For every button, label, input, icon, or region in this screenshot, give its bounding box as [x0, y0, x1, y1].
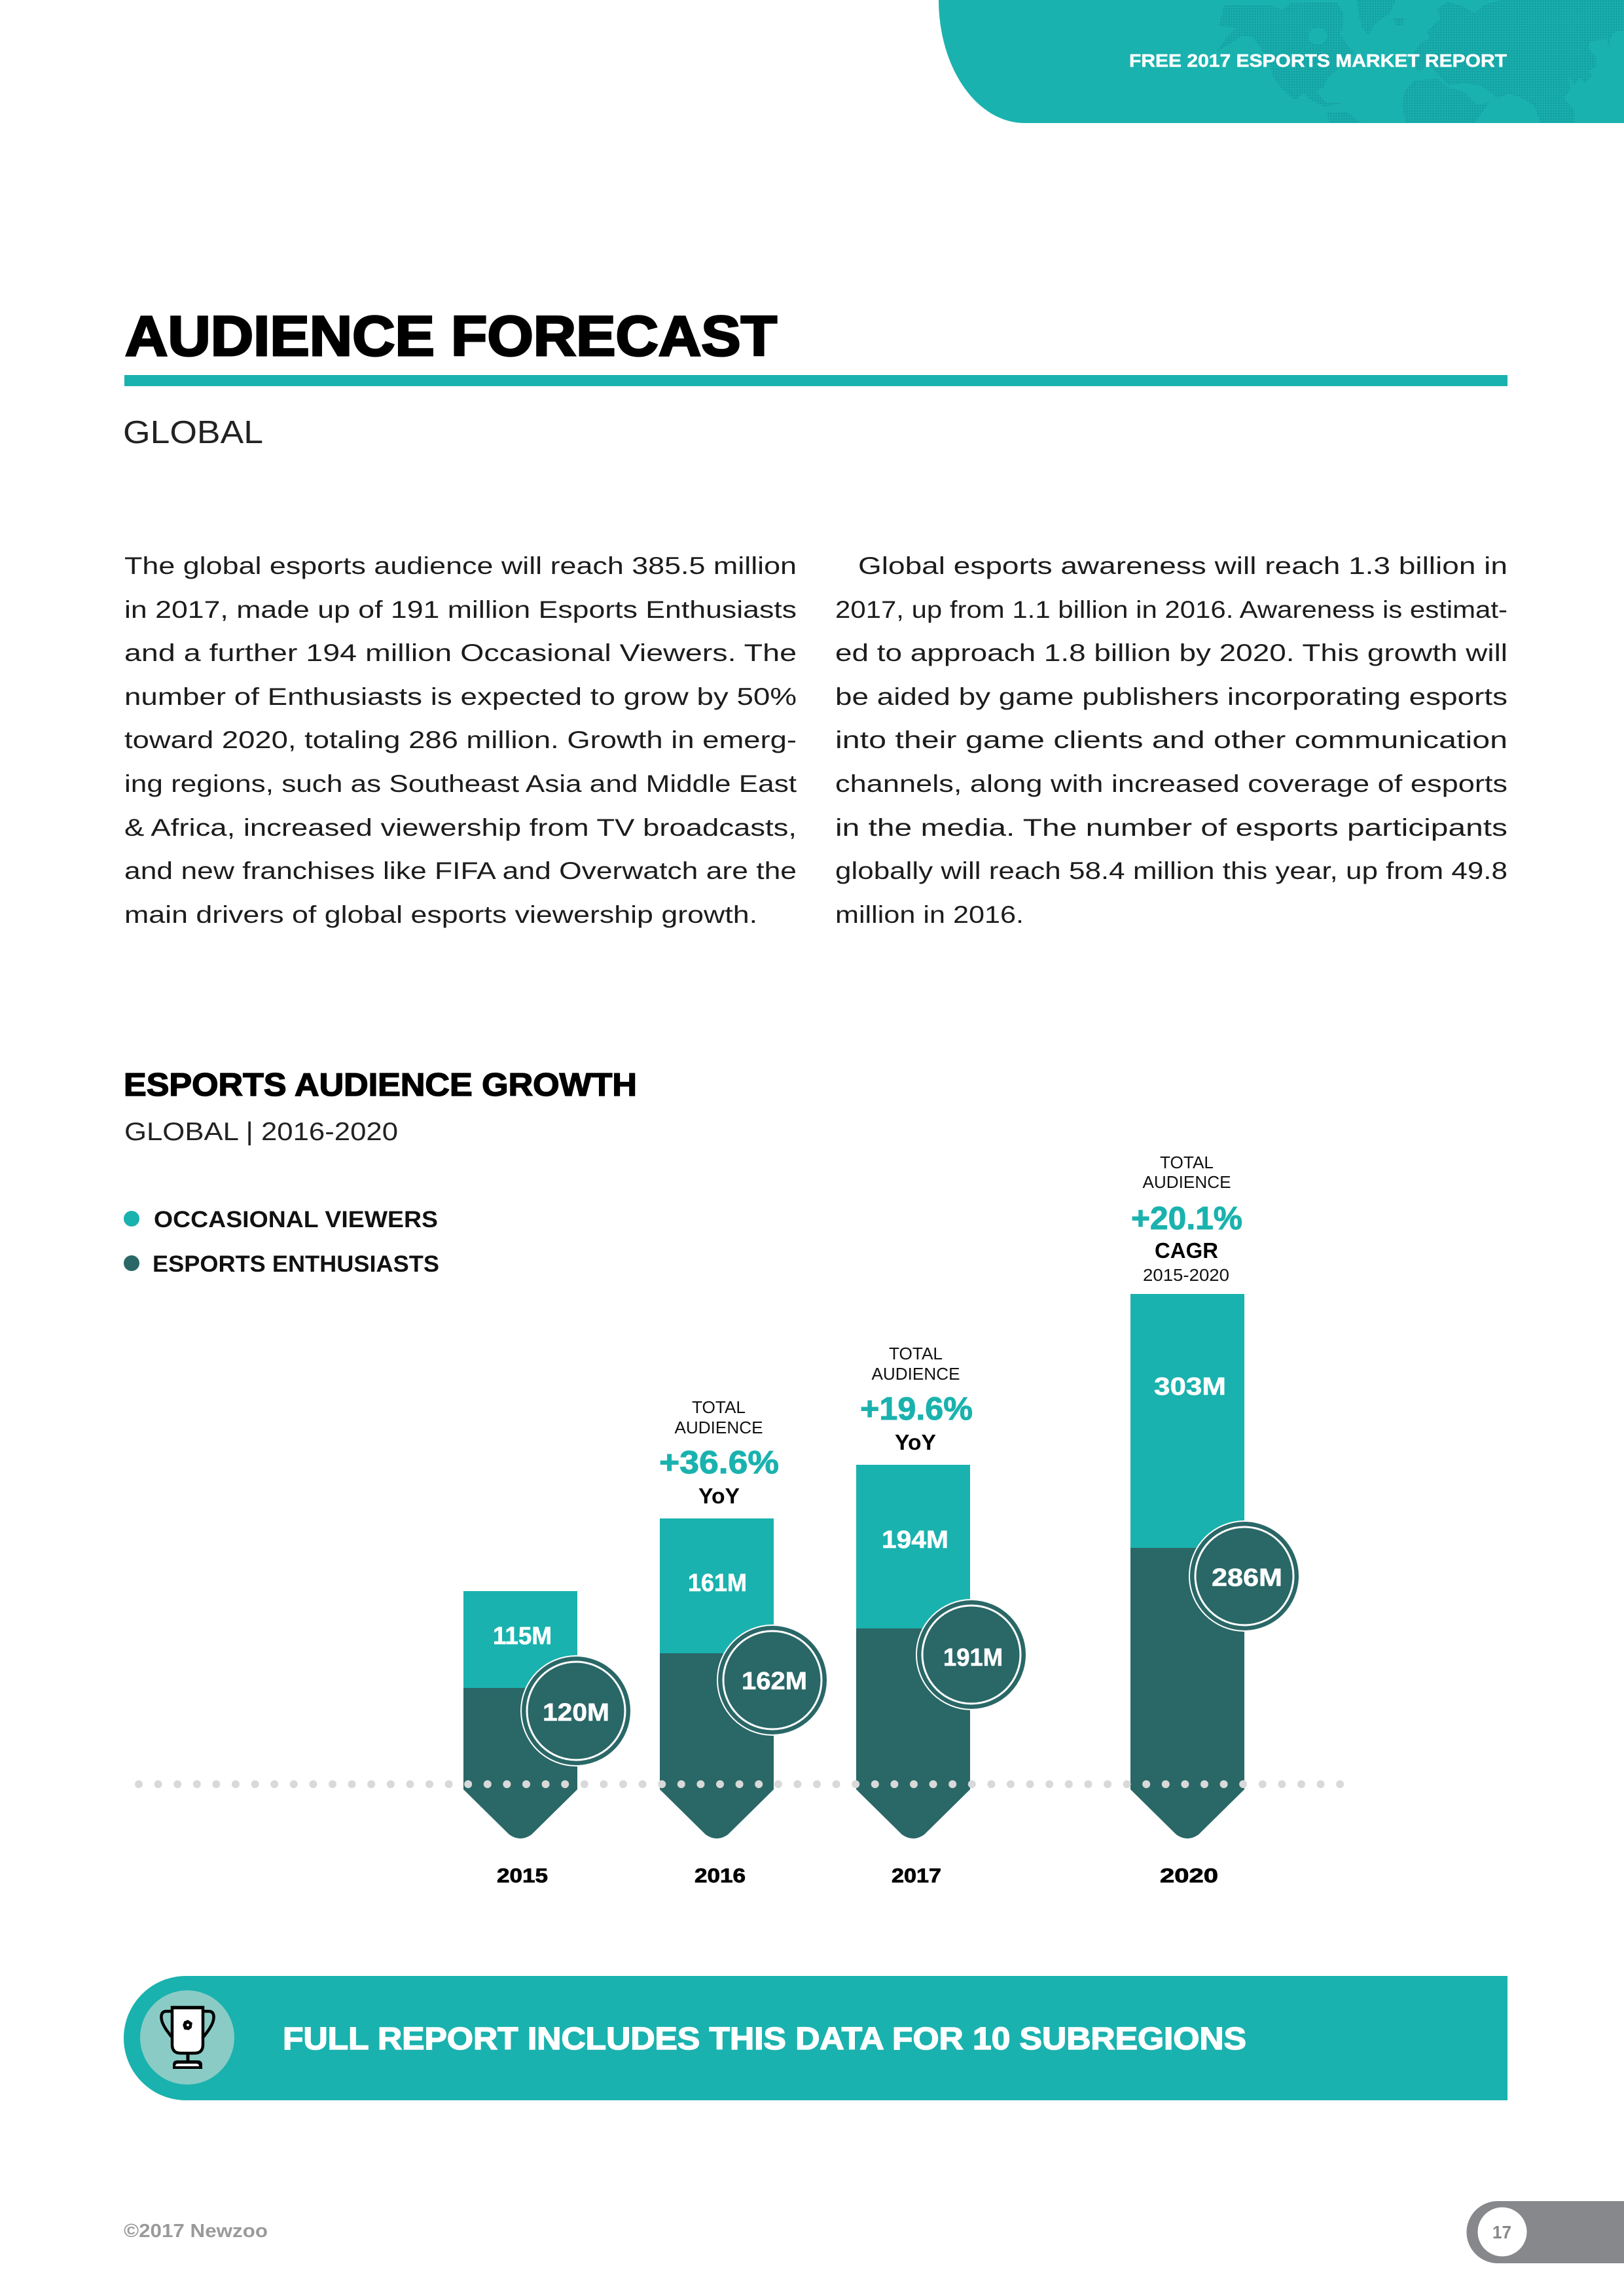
text block: left column: in 2017, made up of 191 million Esports Enthusiasts: [124, 596, 797, 623]
chart subheading: GLOBAL | 2016-2020: [124, 1118, 398, 1146]
annotation 2020: AUDIENCE: [1143, 1172, 1231, 1192]
annotation 2020: CAGR: [1155, 1238, 1218, 1263]
annotation 2017: TOTAL: [889, 1344, 943, 1363]
text block: right column: globally will reach 58.4 million this year, up from 49.8: [835, 857, 1507, 884]
bar 2015: 115M: [493, 1623, 552, 1650]
legend: esports enthusiasts: ESPORTS ENTHUSIASTS: [153, 1251, 439, 1277]
header banner: [939, 0, 1624, 123]
text block: left column: toward 2020, totaling 286 million. Growth in emerg-: [124, 726, 797, 753]
callout banner: [124, 1976, 1507, 2100]
annotation 2016: +36.6%: [659, 1445, 779, 1480]
bar 2020: 303M: [1154, 1373, 1226, 1401]
header label: FREE 2017 ESPORTS MARKET REPORT: [1129, 50, 1507, 71]
bar 2015: [463, 1591, 632, 1839]
annotation 2020: +20.1%: [1131, 1201, 1242, 1236]
dotted axis: [134, 1778, 1345, 1791]
text block: left column: The global esports audience will reach 385.5 million: [124, 552, 797, 579]
text block: right column: 2017, up from 1.1 billion in 2016. Awareness is estimat-: [835, 596, 1507, 623]
world map: Hudson Bay cut-out: [1308, 27, 1327, 45]
bar 2020: [1130, 1153, 1300, 1839]
annotation 2020: TOTAL: [1160, 1153, 1214, 1172]
bubble 2020: 286M: [1212, 1564, 1282, 1592]
annotation 2017: YoY: [895, 1430, 936, 1454]
text block: left column: number of Enthusiasts is expected to grow by 50%: [124, 683, 797, 710]
annotation 2017: [860, 1344, 973, 1454]
world map texture: [1216, 0, 1624, 123]
text block: left column: and a further 194 million Occasional Viewers. The: [124, 639, 797, 666]
text block: right column: in the media. The number of esports participants: [835, 814, 1507, 841]
bubble 2015: 120M: [543, 1699, 609, 1727]
bubble 2016: 162M: [742, 1668, 807, 1695]
title rule: [124, 375, 1507, 386]
annotation 2016: TOTAL: [692, 1397, 746, 1417]
title: AUDIENCE FORECAST: [125, 305, 777, 368]
page number tab: 17: [1492, 2222, 1511, 2242]
year labels: 2016: [695, 1864, 746, 1887]
subtitle: GLOBAL: [123, 415, 263, 450]
page number tab: [1466, 2201, 1624, 2263]
bar 2017: 194M: [882, 1526, 948, 1554]
text block: left column: ing regions, such as Southeast Asia and Middle East: [124, 770, 797, 797]
bubble 2017: [916, 1599, 1027, 1710]
year labels: 2015: [497, 1864, 548, 1887]
text block: left column: and new franchises like FIFA and Overwatch are the: [124, 857, 797, 884]
text block: left column: main drivers of global esports viewership growth.: [124, 901, 757, 928]
year labels: 2020: [1160, 1864, 1218, 1887]
text block: right column: ed to approach 1.8 billion by 2020. This growth will: [835, 639, 1507, 666]
text block: right column: be aided by game publishers incorporating esports: [835, 683, 1507, 710]
bubble 2016: [717, 1624, 828, 1736]
annotation 2016: AUDIENCE: [674, 1418, 763, 1437]
footer copyright: ©2017 Newzoo: [124, 2221, 268, 2242]
bar 2016: 161M: [688, 1570, 747, 1597]
text block: left column: & Africa, increased viewership from TV broadcasts,: [124, 814, 797, 841]
callout text: FULL REPORT INCLUDES THIS DATA FOR 10 SUBREGIONS: [283, 2022, 1246, 2056]
text block: right column: channels, along with increased coverage of esports: [835, 770, 1507, 797]
icon: trophy: [140, 1990, 234, 2085]
year labels: 2017: [892, 1864, 941, 1887]
bar chart: [134, 1153, 1345, 1887]
annotation 2016: YoY: [698, 1484, 740, 1508]
year labels: [497, 1864, 1218, 1887]
annotation 2017: AUDIENCE: [872, 1364, 960, 1384]
legend: [124, 1207, 439, 1277]
annotation 2016: [659, 1397, 779, 1508]
bar 2016: [659, 1397, 828, 1839]
bubble 2015: [520, 1655, 632, 1767]
bubble 2020: [1189, 1520, 1300, 1632]
bar 2017: [856, 1344, 1027, 1839]
legend: occasional viewers: OCCASIONAL VIEWERS: [154, 1207, 438, 1232]
text block: left column: [124, 552, 797, 928]
bubble 2017: 191M: [943, 1644, 1003, 1672]
annotation 2020: [1131, 1153, 1242, 1285]
chart heading: ESPORTS AUDIENCE GROWTH: [124, 1067, 637, 1103]
text block: right column: Global esports awareness will reach 1.3 billion in: [858, 552, 1507, 579]
text block: right column: million in 2016.: [835, 901, 1024, 928]
annotation 2017: +19.6%: [860, 1391, 973, 1427]
annotation 2020: 2015-2020: [1143, 1265, 1229, 1285]
text block: right column: into their game clients and other communication: [835, 726, 1507, 753]
text block: right column: [835, 552, 1507, 928]
